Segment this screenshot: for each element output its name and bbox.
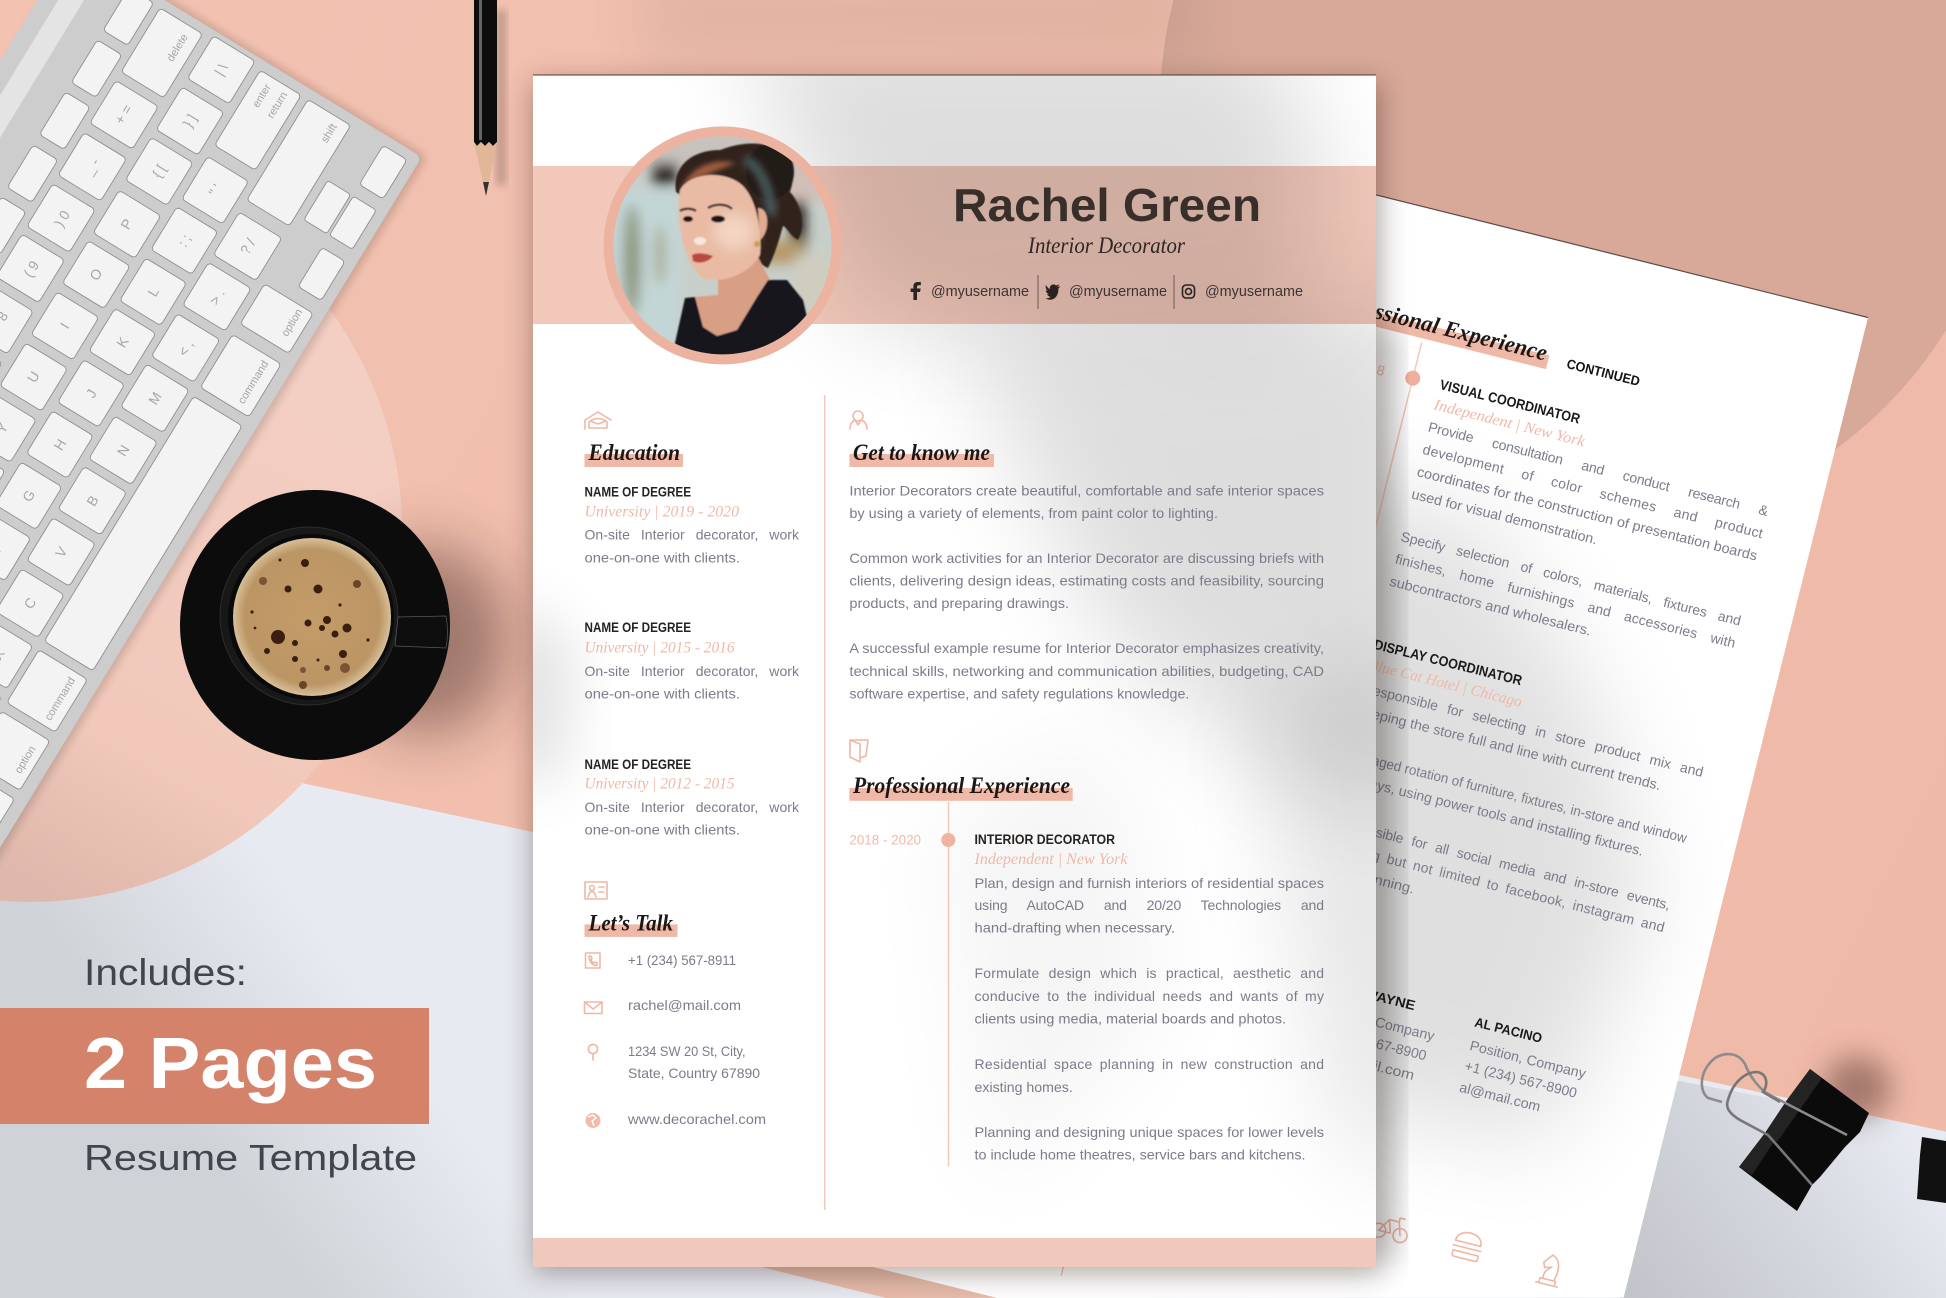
footer band page two [762, 1241, 997, 1298]
keyboard: V [52, 543, 71, 560]
second binder clip [1917, 1137, 1946, 1203]
job details: Plan, design and furnish interiors of residential spaces [974, 875, 1324, 891]
keyboard: N [114, 442, 133, 459]
heading: professional experience: Professional Experience [852, 773, 1070, 798]
job details: clients using media, material boards and photos. [974, 1011, 1286, 1027]
job details: using AutoCAD and 20/20 Technologies and [974, 897, 1324, 913]
job: display coordinator: displays, using power tools and installing fixtures. [1340, 768, 1645, 859]
social handles: @myusername [1205, 284, 1303, 300]
entry two: On-site Interior decorator, work [584, 663, 800, 679]
keyboard: return [265, 90, 290, 121]
job details: INTERIOR DECORATOR [974, 832, 1115, 847]
keyboard: | \ [211, 60, 231, 79]
entry three [584, 757, 800, 838]
entry two [584, 620, 800, 702]
keyboard: J [82, 386, 100, 401]
panel: contact [584, 882, 766, 1128]
job: display coordinator: store planning. [1317, 857, 1416, 896]
paragraph one: Interior Decorators create beautiful, comfortable and safe interior spaces [849, 482, 1324, 498]
job details [973, 832, 1324, 1163]
job: visual coordinator: Specify selection of colors, materials, fixtures and [1399, 528, 1743, 629]
job details: Independent | New York [973, 851, 1129, 868]
heading: education: Education [588, 440, 680, 465]
job details: conducive to the individual needs and wants of my [974, 988, 1324, 1004]
keyboard: command [236, 359, 271, 406]
keyboard: option [279, 307, 305, 339]
keyboard: O [86, 265, 106, 283]
entry three: University | 2012 - 2015 [584, 776, 735, 793]
keyboard: { [ [149, 162, 169, 181]
icon: book [850, 740, 868, 762]
panel: get to know me [849, 411, 1324, 702]
reference: al pacino: al@mail.com [1458, 1079, 1542, 1114]
paragraph one: by using a variety of elements, from paint color to lighting. [849, 505, 1218, 521]
entry three: On-site Interior decorator, work [584, 799, 800, 815]
contact email: rachel@mail.com [628, 997, 741, 1013]
promo label: resume template: Resume Template [84, 1137, 417, 1178]
job: visual coordinator: Provide consultation and conduct research & [1427, 419, 1771, 519]
entry one: NAME OF DEGREE [584, 484, 691, 499]
paragraph one [849, 482, 1324, 521]
keyboard: ) 0 [51, 207, 73, 230]
reference: john wayne: john@mail.com [1305, 1041, 1416, 1083]
contact address: 1234 SW 20 St, City, [628, 1043, 746, 1059]
profile photo [604, 126, 842, 364]
job: display coordinator: including but not limited to facebook, instagram and [1323, 835, 1666, 935]
job: visual coordinator: finishes, home furnishings and accessories with [1394, 551, 1737, 651]
column divider [824, 395, 826, 1210]
paragraph three: software expertise, and safety regulations knowledge. [849, 686, 1189, 702]
header band [533, 166, 1376, 324]
entry three: one-on-one with clients. [584, 822, 740, 838]
contact website: www.decorachel.com [627, 1111, 766, 1127]
contact address: State, Country 67890 [628, 1065, 760, 1081]
keyboard: L [144, 284, 162, 299]
job details: hand-drafting when necessary. [974, 920, 1175, 936]
icon: burger [1451, 1230, 1484, 1262]
job dates: 2018 - 2020 [849, 831, 921, 847]
icon: id card [585, 882, 607, 899]
entry two: NAME OF DEGREE [584, 620, 691, 635]
paragraph two [849, 550, 1324, 611]
contact phone: +1 (234) 567-8911 [628, 952, 736, 968]
keyboard: command [43, 675, 78, 723]
name title: Rachel Green [953, 179, 1261, 231]
keyboard: < , [175, 337, 197, 359]
keyboard: enter [250, 82, 274, 110]
main resume page [500, 20, 1440, 1274]
heading: professional experience continued: CONTINUED [1565, 356, 1642, 389]
heading: lets talk: Let’s Talk [588, 910, 673, 936]
keyboard: G [19, 487, 38, 505]
timeline marker: 2016 - 2018 [1310, 345, 1387, 379]
icon: facebook [911, 282, 921, 300]
entry one [584, 484, 800, 566]
job: display coordinator: Responsible for all social media and in-store events, [1328, 813, 1672, 913]
keyboard: option [13, 744, 38, 776]
heading: professional experience continued: Professional Experience [1322, 286, 1550, 365]
reference: john wayne: Position, Company [1317, 999, 1436, 1044]
paragraph two: clients, delivering design ideas, estimating costs and feasibility, sourcing [849, 572, 1324, 588]
social handles: @myusername [931, 284, 1029, 300]
heading: professional experience continued [1315, 284, 1644, 392]
entry one: University | 2019 - 2020 [584, 504, 739, 520]
paragraph two: Common work activities for an Interior Decorator are discussing briefs with [849, 550, 1324, 566]
reference: al pacino [1457, 1015, 1593, 1123]
reference: john wayne: +1 (234) 567-8900 [1312, 1020, 1428, 1063]
second resume page [762, 114, 1868, 1298]
reference: john wayne [1303, 975, 1442, 1085]
entry two: University | 2015 - 2016 [584, 639, 735, 656]
paragraph two: products, and preparing drawings. [849, 595, 1069, 611]
keyboard: I [57, 320, 72, 331]
job: visual coordinator: Independent | New York [1431, 396, 1588, 451]
icon: twitter [1045, 284, 1060, 300]
job: visual coordinator [1387, 376, 1781, 673]
entry one: one-on-one with clients. [584, 550, 740, 566]
keyboard: delete [165, 32, 191, 64]
keyboard: ( 9 [20, 258, 42, 280]
icon: graduation cap [585, 412, 611, 429]
icon: person [850, 411, 867, 429]
binder clip [1702, 1054, 1891, 1211]
keyboard: B [83, 493, 102, 509]
keyboard: H [50, 436, 69, 453]
social handles [911, 275, 1303, 309]
keyboard: + = [111, 101, 135, 127]
timeline [941, 802, 955, 1166]
job: display coordinator: Managed rotation of furniture, fixtures, in-store and window [1345, 746, 1689, 846]
job details: existing homes. [974, 1079, 1073, 1095]
keyboard: M [145, 389, 165, 407]
promo banner: 2 pages: 2 Pages [84, 1024, 377, 1104]
keyboard: K [113, 333, 132, 350]
keyboard: U [24, 368, 43, 385]
main page shadow on second page [1372, 330, 1398, 1260]
keyboard [0, 0, 428, 928]
icon: bicycle [1370, 1212, 1411, 1244]
footer band [533, 1238, 1376, 1267]
entry three: NAME OF DEGREE [584, 757, 691, 772]
reference: al pacino: Position, Company [1468, 1037, 1588, 1081]
keyboard: ? / [237, 236, 259, 257]
promo banner: 2 pages [0, 1008, 429, 1124]
keyboard: P [117, 216, 136, 232]
contact phone [586, 952, 736, 968]
job subtitle: Interior Decorator [1027, 233, 1186, 258]
pencil [474, 0, 506, 196]
job: visual coordinator: development of color schemes and product [1421, 441, 1765, 541]
contact website [586, 1111, 766, 1128]
promo label: includes: Includes: [84, 952, 247, 993]
job: display coordinator: Responsible for selecting in store product mix and [1362, 680, 1705, 780]
keyboard: shift [319, 122, 340, 145]
contact email [584, 997, 741, 1014]
timeline marker [1183, 317, 1429, 895]
paragraph three [849, 640, 1324, 702]
reference: john wayne: JOHN WAYNE [1319, 975, 1417, 1013]
job: visual coordinator: used for visual demonstration. [1410, 486, 1599, 547]
paragraph three: technical skills, networking and communication abilities, budgeting, CAD [849, 663, 1324, 679]
social handles: @myusername [1069, 284, 1167, 300]
keyboard: _ - [80, 155, 103, 178]
reference: al pacino: +1 (234) 567-8900 [1463, 1057, 1579, 1101]
contact address [588, 1043, 760, 1081]
coffee cup on saucer [180, 490, 510, 760]
job: visual coordinator: VISUAL COORDINATOR [1438, 376, 1582, 427]
entry one: On-site Interior decorator, work [584, 526, 800, 542]
heading: get to know me: Get to know me [853, 440, 990, 465]
job details: to include home theatres, service bars and kitchens. [974, 1147, 1306, 1163]
reference: al pacino: AL PACINO [1473, 1015, 1544, 1046]
keyboard: > . [206, 286, 228, 308]
job: visual coordinator: coordinates for the construction of presentation boards [1416, 463, 1759, 564]
paragraph three: A successful example resume for Interior Decorator emphasizes creativity, [849, 640, 1324, 656]
job details: Formulate design which is practical, aesthetic and [974, 965, 1324, 981]
job: display coordinator: keeping the store full and line with current trends. [1356, 702, 1663, 793]
icon: instagram [1182, 285, 1194, 298]
panel: education [584, 412, 800, 838]
job: display coordinator: Blue Cat Hotel | Chicago [1367, 656, 1524, 711]
keyboard: } ] [180, 111, 200, 130]
panel: professional experience [849, 740, 1324, 1166]
job: visual coordinator: subcontractors and wholesalers. [1388, 573, 1593, 639]
column divider page two [1061, 281, 1309, 1276]
entry two: one-on-one with clients. [584, 686, 740, 702]
job: display coordinator: DISPLAY COORDINATOR [1372, 636, 1524, 688]
job: display coordinator [1317, 636, 1717, 958]
keyboard: C [20, 595, 39, 612]
job details: Planning and designing unique spaces for lower levels [974, 1124, 1324, 1140]
icon: chess knight [1536, 1253, 1564, 1287]
keyboard: " ' [205, 181, 225, 199]
job details: Residential space planning in new construction and [974, 1056, 1324, 1072]
keyboard: : ; [175, 231, 194, 250]
